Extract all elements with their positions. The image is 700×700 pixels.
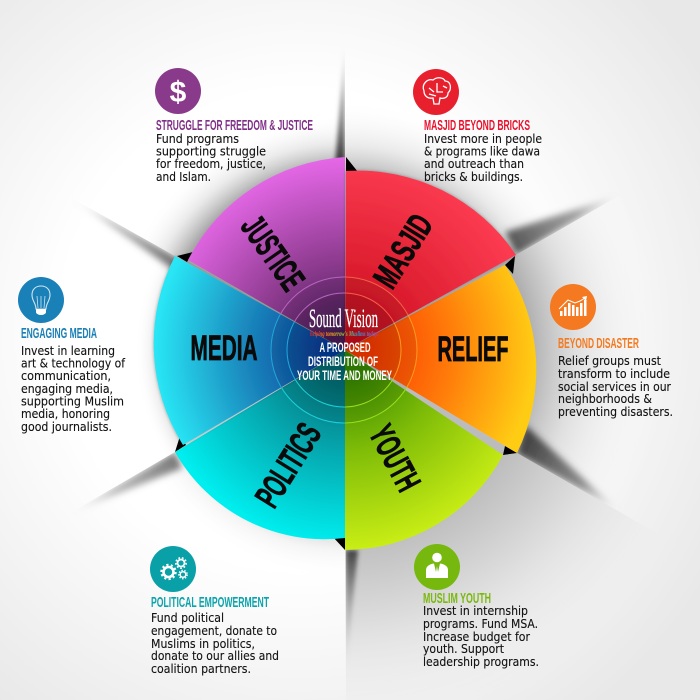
label: politics: POLITICS bbox=[248, 416, 329, 514]
heading: BEYOND DISASTER bbox=[558, 335, 639, 352]
centre title: YOUR TIME AND MONEY bbox=[297, 367, 392, 383]
text block: Muslims in politics, bbox=[151, 637, 255, 651]
heading: STRUGGLE FOR FREEDOM & JUSTICE bbox=[156, 117, 313, 134]
text block: Invest in internship bbox=[423, 604, 528, 618]
heading: MASJID BEYOND BRICKS bbox=[424, 117, 530, 134]
label: media: MEDIA bbox=[190, 329, 258, 368]
icon: light bulb bbox=[18, 277, 64, 323]
logo: Sound Vision: helping tomorrow's Muslims today! bbox=[310, 329, 379, 338]
label: justice: JUSTICE bbox=[233, 209, 312, 298]
text block bbox=[558, 354, 673, 419]
text block bbox=[156, 132, 266, 184]
icon: dollar sign bbox=[155, 68, 201, 114]
panel: masjid beyond bricks bbox=[413, 69, 542, 184]
text block: supporting Muslim bbox=[21, 394, 124, 408]
text block: and outreach than bbox=[424, 157, 524, 171]
heading: MUSLIM YOUTH bbox=[423, 590, 491, 607]
text block: for freedom, justice, bbox=[156, 157, 266, 171]
segment: youth bbox=[345, 350, 503, 550]
panel: political empowerment bbox=[150, 546, 279, 676]
text block: Increase budget for bbox=[423, 630, 530, 644]
heading: POLITICAL EMPOWERMENT bbox=[151, 594, 269, 611]
centre title bbox=[297, 339, 392, 383]
segment: media bbox=[154, 256, 345, 445]
text block: Fund political bbox=[151, 611, 224, 625]
panel: struggle for freedom and justice bbox=[155, 68, 313, 184]
icon: person in suit bbox=[414, 544, 460, 590]
text block: Invest in learning bbox=[21, 344, 115, 358]
text block: supporting struggle bbox=[156, 144, 266, 158]
text block: & programs like dawa bbox=[424, 144, 540, 158]
wheel bbox=[154, 157, 536, 550]
segment: justice bbox=[188, 157, 345, 350]
panel: engaging media bbox=[18, 277, 126, 434]
label: youth: YOUTH bbox=[361, 419, 428, 498]
text block: Fund programs bbox=[156, 132, 239, 146]
text block: programs. Fund MSA. bbox=[423, 617, 538, 631]
text block: good journalists. bbox=[21, 420, 112, 434]
text block: media, honoring bbox=[21, 407, 110, 421]
icon: brain bbox=[413, 69, 459, 115]
black fold triangles bbox=[175, 157, 517, 550]
text block: Relief groups must bbox=[558, 354, 661, 368]
segment: masjid bbox=[345, 171, 516, 350]
centre title: A PROPOSED bbox=[320, 339, 370, 355]
centre rings bbox=[271, 277, 417, 423]
icon: gears bbox=[150, 546, 196, 592]
text block: bricks & buildings. bbox=[424, 170, 523, 184]
icon: dollar sign: $ bbox=[170, 76, 187, 109]
heading: ENGAGING MEDIA bbox=[21, 325, 97, 342]
panel: beyond disaster bbox=[550, 284, 673, 419]
label: masjid: MASJID bbox=[366, 207, 441, 295]
segment: relief bbox=[345, 265, 536, 453]
text block: neighborhoods & bbox=[558, 392, 652, 406]
logo: Sound Vision bbox=[309, 304, 379, 338]
text block: social services in our bbox=[558, 380, 671, 394]
text block: and Islam. bbox=[156, 170, 211, 184]
text block bbox=[151, 611, 279, 676]
text block bbox=[424, 132, 542, 184]
label: relief: RELIEF bbox=[438, 330, 508, 369]
text block: donate to our allies and bbox=[151, 649, 279, 663]
segment: politics bbox=[175, 350, 345, 539]
centre title: DISTRIBUTION OF bbox=[308, 353, 378, 369]
text block: leadership programs. bbox=[423, 655, 539, 669]
text block: transform to include bbox=[558, 367, 670, 381]
text block: engaging media, bbox=[21, 382, 113, 396]
text block: youth. Support bbox=[423, 642, 504, 656]
text block: coalition partners. bbox=[151, 662, 251, 676]
panel: muslim youth bbox=[414, 544, 539, 669]
text block: communication, bbox=[21, 369, 111, 383]
text block: Invest more in people bbox=[424, 132, 542, 146]
text block: art & technology of bbox=[21, 357, 126, 371]
icon: rising bar chart bbox=[550, 284, 596, 330]
text block bbox=[21, 344, 126, 434]
wheel: Sound Vision bbox=[309, 304, 378, 333]
text block bbox=[423, 604, 539, 669]
text block: engagement, donate to bbox=[151, 624, 277, 638]
text block: preventing disasters. bbox=[558, 405, 673, 419]
